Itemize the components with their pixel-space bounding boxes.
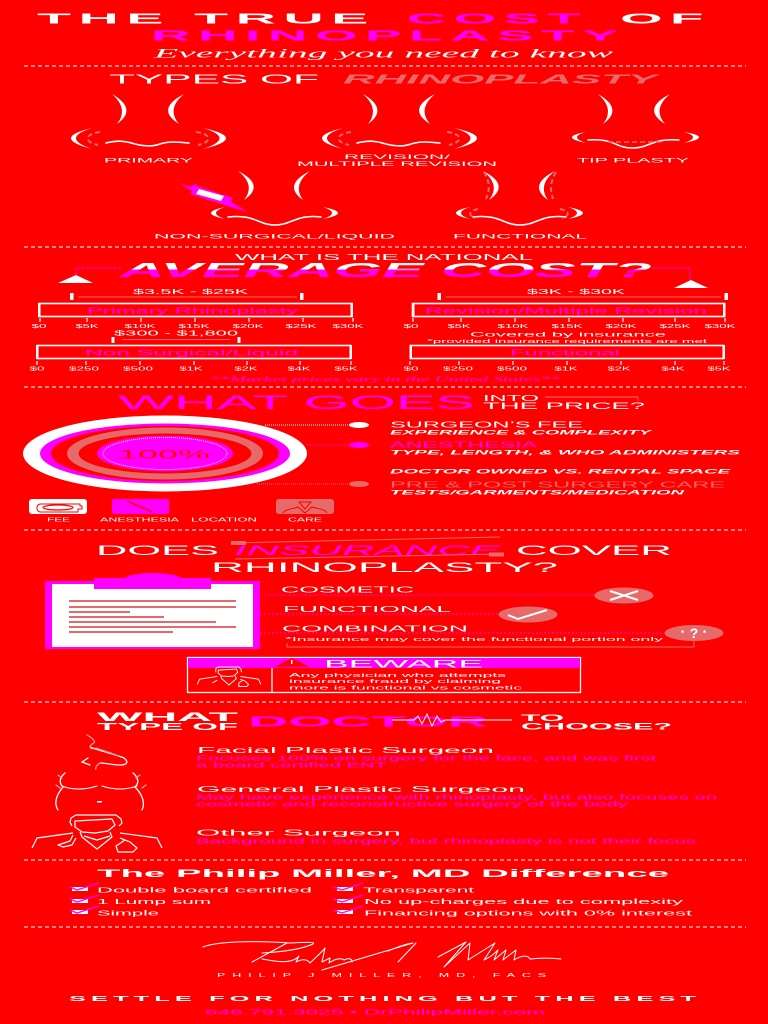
text: other surgeon: Other Surgeon	[196, 828, 402, 838]
checklist: left: Double board certified	[97, 888, 312, 894]
label: revision	[297, 154, 498, 168]
text: care: PRE & POST SURGERY CARE	[390, 480, 725, 490]
heading: what type of	[97, 710, 241, 733]
range: functional: $0	[404, 366, 418, 372]
icon: nose profile	[82, 735, 127, 770]
heading: into the price: THE PRICE?	[483, 401, 645, 412]
text: surgeon's fee: EXPERIENCE & COMPLEXITY	[390, 430, 654, 436]
section: what goes into the price	[23, 392, 740, 524]
row: functional	[260, 605, 558, 622]
checklist: right	[333, 883, 692, 918]
range: primary: $25K	[286, 324, 317, 330]
callout: beware	[188, 658, 580, 692]
range: revision: $5K	[448, 324, 471, 330]
range: non-surgical: $1K	[180, 366, 203, 372]
icon: primary nose	[71, 94, 226, 149]
range: primary: $20K	[232, 324, 264, 330]
section: types of rhinoplasty	[71, 72, 699, 240]
heading: insurance: DOES	[96, 542, 219, 558]
label: functional: FUNCTIONAL	[453, 234, 588, 240]
title: THE TRUE	[37, 12, 376, 28]
pointer: right	[652, 268, 708, 288]
text: facial plastic surgeon: Facial Plastic Surgeon	[197, 745, 495, 755]
range: revision: $10K	[498, 324, 529, 330]
section: insurance	[45, 537, 724, 692]
range: revision: $3K - $30K	[527, 289, 626, 296]
range: non-surgical	[30, 330, 358, 372]
range: revision: $20K	[606, 324, 637, 330]
heading: into the price: INTO	[483, 394, 539, 403]
range: non-surgical: $5K	[334, 366, 358, 372]
checklist: right: No up-charges due to complexity	[364, 899, 685, 906]
text: care: TESTS/GARMENTS/MEDICATION	[390, 490, 686, 496]
heading: into the price	[483, 394, 645, 412]
heading: types	[109, 72, 661, 86]
range: functional: $250	[443, 366, 473, 372]
row: cosmetic	[265, 586, 654, 604]
title	[37, 12, 711, 44]
icon: functional nose	[456, 171, 583, 225]
icon: non-surgical nose	[211, 171, 338, 225]
range: non-surgical: $4K	[288, 366, 311, 372]
text: facial plastic surgeon: Focuses 100% on surgery for the face, and was first	[196, 756, 656, 762]
range: non-surgical: Non Surgical/Liquid	[85, 348, 298, 358]
range: functional: $1K	[554, 366, 578, 372]
label: tip plasty: TIP PLASTY	[577, 158, 691, 164]
heading: difference: The Philip Miller, MD Difference	[97, 868, 669, 880]
icon: care	[276, 499, 334, 514]
range: non-surgical: $250	[69, 366, 99, 372]
text: general plastic surgeon: May have experience with rhinoplasty, but also focuses on	[196, 794, 717, 802]
text: facial plastic surgeon	[196, 745, 656, 770]
heading: types: RHINOPLASTY	[343, 72, 661, 86]
icon: fee	[29, 499, 87, 514]
range: primary: $30K	[332, 324, 364, 330]
icon labels: CARE	[288, 518, 324, 524]
icon labels	[47, 518, 324, 524]
title: COST	[407, 12, 588, 28]
range: primary: $3.5K - $25K	[133, 289, 249, 296]
range: revision: Revision/Multiple Revision	[425, 306, 707, 316]
heading: insurance: RHINOPLASTY?	[211, 559, 559, 575]
icon: syringe	[181, 183, 248, 212]
icon labels: ANESTHESIA	[100, 518, 181, 524]
text: surgeon's fee: SURGEON’S FEE	[390, 420, 583, 430]
range: revision: $25K	[660, 324, 691, 330]
range: functional: Covered by insurance	[470, 332, 667, 338]
text: other surgeon	[196, 828, 697, 846]
range: functional: *provided insurance requirements are met	[427, 339, 709, 345]
text: location: DOCTOR OWNED VS. RENTAL SPACE	[390, 470, 733, 476]
range: functional	[404, 332, 731, 372]
checklist: right: Financing options with 0% interest	[364, 910, 692, 918]
range: functional: $500	[497, 366, 527, 372]
text: anesthesia: TYPE, LENGTH, & WHO ADMINISTERS	[390, 450, 740, 456]
text: facial plastic surgeon: a board certified ENT	[196, 762, 389, 770]
label: revision: MULTIPLE REVISION	[297, 161, 498, 168]
range: primary: $5K	[76, 324, 99, 330]
icon: anesthesia	[112, 499, 169, 514]
range: primary: $10K	[124, 324, 156, 330]
text: general plastic surgeon: General Plastic Surgeon	[197, 784, 526, 794]
heading: insurance: COVER	[516, 542, 672, 558]
heading: insurance	[96, 537, 672, 575]
label: primary: PRIMARY	[104, 158, 195, 164]
row: cosmetic: COSMETIC	[281, 586, 415, 594]
text: other surgeon: Background in surgery, but rhinoplasty is not their focus	[196, 838, 697, 846]
label: non-surgical: NON-SURGICAL/LIQUID	[154, 234, 396, 240]
heading: national: WHAT IS THE NATIONAL	[235, 253, 535, 262]
heading: types: TYPES OF	[109, 72, 319, 86]
text: anesthesia	[390, 440, 740, 456]
icon labels: LOCATION	[191, 518, 258, 524]
heading: what goes: WHAT GOES	[118, 392, 475, 414]
heading: average cost: AVERAGE COST?	[117, 260, 652, 282]
heading: what type of: TYPE OF	[97, 722, 238, 733]
range: revision	[404, 289, 736, 330]
footnote: market prices: **Market prices vary in the United States**	[210, 374, 561, 384]
checklist: left: 1 Lump sum	[97, 899, 211, 906]
text: care	[390, 480, 725, 496]
heading: doctor	[248, 714, 512, 730]
text: anesthesia: ANESTHESIA	[390, 440, 539, 450]
tagline: SETTLE FOR NOTHING BUT THE BEST	[69, 994, 701, 1003]
range: primary: $15K	[178, 324, 210, 330]
section: average cost	[30, 253, 736, 384]
chart: target rings: 100%	[118, 448, 211, 462]
heading: doctor: DOCTOR	[248, 714, 489, 730]
title: RHINOPLASTY	[151, 28, 626, 44]
pointer: anesthesia	[306, 442, 369, 448]
row: functional: FUNCTIONAL	[283, 605, 453, 614]
callout: beware: more is functional vs cosmetic	[289, 686, 523, 692]
range: non-surgical: $300 - $1,800	[114, 330, 238, 338]
icon labels: FEE	[47, 518, 72, 524]
row: combination: *	[703, 629, 707, 638]
range: revision: $0	[404, 324, 418, 330]
heading: to choose: TO	[521, 713, 564, 724]
checklist: left	[70, 883, 312, 918]
callout: beware: Any physician who attempts	[289, 673, 507, 679]
heading: to choose: CHOOSE?	[521, 722, 673, 732]
range: functional: $4K	[662, 366, 685, 372]
range: non-surgical: $0	[30, 366, 44, 372]
row: combination: *	[681, 629, 685, 638]
range: non-surgical: $2K	[234, 366, 258, 372]
icon: clipboard	[45, 573, 260, 649]
icon: revision nose	[322, 94, 477, 149]
section: difference	[70, 868, 692, 918]
name line: PHILIP J MILLER, MD, FACS	[217, 973, 553, 979]
chart: target rings	[23, 416, 307, 492]
pointer: surgeon fee	[265, 422, 369, 428]
range: primary: $0	[32, 324, 46, 330]
title: OF	[620, 12, 711, 28]
section: what doctor	[32, 710, 717, 852]
signature	[203, 942, 561, 970]
range: non-surgical: $500	[123, 366, 153, 372]
checklist: right: Transparent	[363, 888, 474, 894]
heading: what type of: WHAT	[97, 710, 241, 724]
range: functional: Functional	[510, 348, 621, 358]
row: combination: COMBINATION	[282, 624, 469, 634]
range: revision: $15K	[552, 324, 583, 330]
row: combination: *Insurance may cover the functional portion only	[285, 637, 664, 643]
icon: tip plasty nose	[572, 94, 699, 148]
contact: 646.791.3025 • DrPhilipMiller.com	[205, 1008, 545, 1016]
row: combination	[260, 624, 724, 647]
pointer: care	[257, 481, 369, 487]
text: general plastic surgeon: cosmetic and reconstructive surgery of the body	[196, 802, 629, 808]
callout: beware: insurance fraud by claiming	[289, 679, 501, 685]
heading: insurance: INSURANCE	[234, 542, 502, 558]
row: combination: ?	[690, 625, 698, 641]
pointer: left	[58, 268, 122, 283]
range: primary	[32, 289, 364, 330]
icon: nose front	[56, 773, 146, 810]
icon: doctor	[32, 815, 162, 852]
text: general plastic surgeon	[196, 784, 717, 808]
subtitle: Everything you need to know	[151, 46, 614, 60]
range: functional: $5K	[708, 366, 731, 372]
heading: to choose	[521, 713, 673, 732]
range: functional: $2K	[608, 366, 631, 372]
range: primary: Primary Rhinoplasty	[87, 306, 298, 316]
range: revision: $30K	[704, 324, 736, 330]
callout: beware: BEWARE	[324, 658, 483, 670]
text: surgeon's fee	[390, 420, 654, 436]
label: revision: REVISION/	[344, 154, 451, 161]
checklist: left: Simple	[97, 910, 159, 918]
